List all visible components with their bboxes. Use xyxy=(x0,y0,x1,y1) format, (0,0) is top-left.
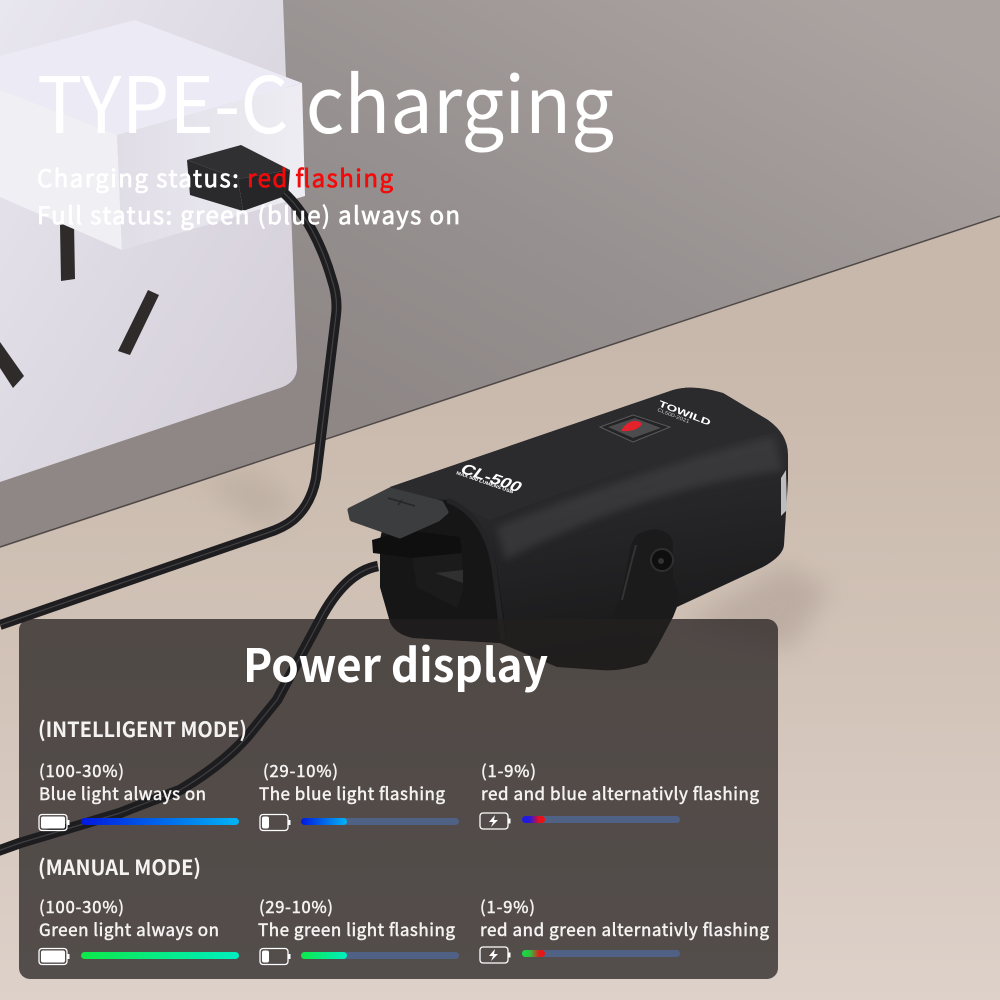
charging cable 2 xyxy=(0,566,378,852)
charging cable 1 xyxy=(0,193,336,625)
column 3: red and green alternativly flashing xyxy=(480,916,769,941)
brand label: TOWILD xyxy=(657,399,713,428)
bike light xyxy=(350,388,788,670)
rear bezel xyxy=(447,500,503,640)
manual mode group xyxy=(38,852,769,964)
manual mode heading: (MANUAL MODE) xyxy=(38,852,201,882)
charging status text: Charging status: red flashing xyxy=(37,159,393,194)
background: wall xyxy=(0,0,1000,560)
rear section xyxy=(380,497,507,643)
charger block xyxy=(0,20,305,250)
column 2: The green light flashing xyxy=(258,916,455,941)
column 2: (29-10%) xyxy=(259,894,333,918)
model label: CL-500 xyxy=(457,461,526,495)
background: table top xyxy=(0,217,1000,1000)
intelligent mode group xyxy=(38,714,759,830)
front lens edge xyxy=(781,470,787,516)
column 3: (1-9%) xyxy=(481,758,536,782)
USB plug xyxy=(187,145,290,211)
column 2 xyxy=(258,894,459,964)
column 2 xyxy=(259,758,459,830)
charging port xyxy=(372,530,463,608)
intelligent mode heading: (INTELLIGENT MODE) xyxy=(38,714,247,744)
column 1 xyxy=(39,758,239,830)
column 1: (100-30%) xyxy=(39,894,124,918)
column 2: The blue light flashing xyxy=(259,780,445,805)
title: TYPE-C charging xyxy=(37,44,614,156)
column 2: (29-10%) xyxy=(263,758,338,782)
column 3: (1-9%) xyxy=(480,894,535,918)
power button xyxy=(600,415,670,442)
column 1: (100-30%) xyxy=(39,758,124,782)
column 3 xyxy=(480,758,759,829)
silicone port cover xyxy=(350,490,446,536)
mount arm xyxy=(613,529,680,640)
brand label xyxy=(656,399,713,428)
column 1: Blue light always on xyxy=(39,780,206,805)
column 3 xyxy=(480,894,769,963)
mount screw xyxy=(651,549,673,571)
title xyxy=(37,44,614,231)
top surface xyxy=(390,388,777,520)
panel: power display xyxy=(19,619,778,979)
icon: outlet slots xyxy=(0,222,159,388)
brand label: CL500-2021 xyxy=(656,407,690,425)
column 1 xyxy=(39,894,239,964)
model label: MAX 500 LUMENS USB xyxy=(456,470,515,495)
ridge highlight xyxy=(497,437,783,560)
column 1: Green light always on xyxy=(39,916,219,941)
panel heading: Power display xyxy=(243,630,548,696)
column 3: red and blue alternativly flashing xyxy=(481,780,759,805)
wall outlet plate xyxy=(0,0,297,482)
full status text: Full status: green (blue) always on xyxy=(37,196,460,231)
